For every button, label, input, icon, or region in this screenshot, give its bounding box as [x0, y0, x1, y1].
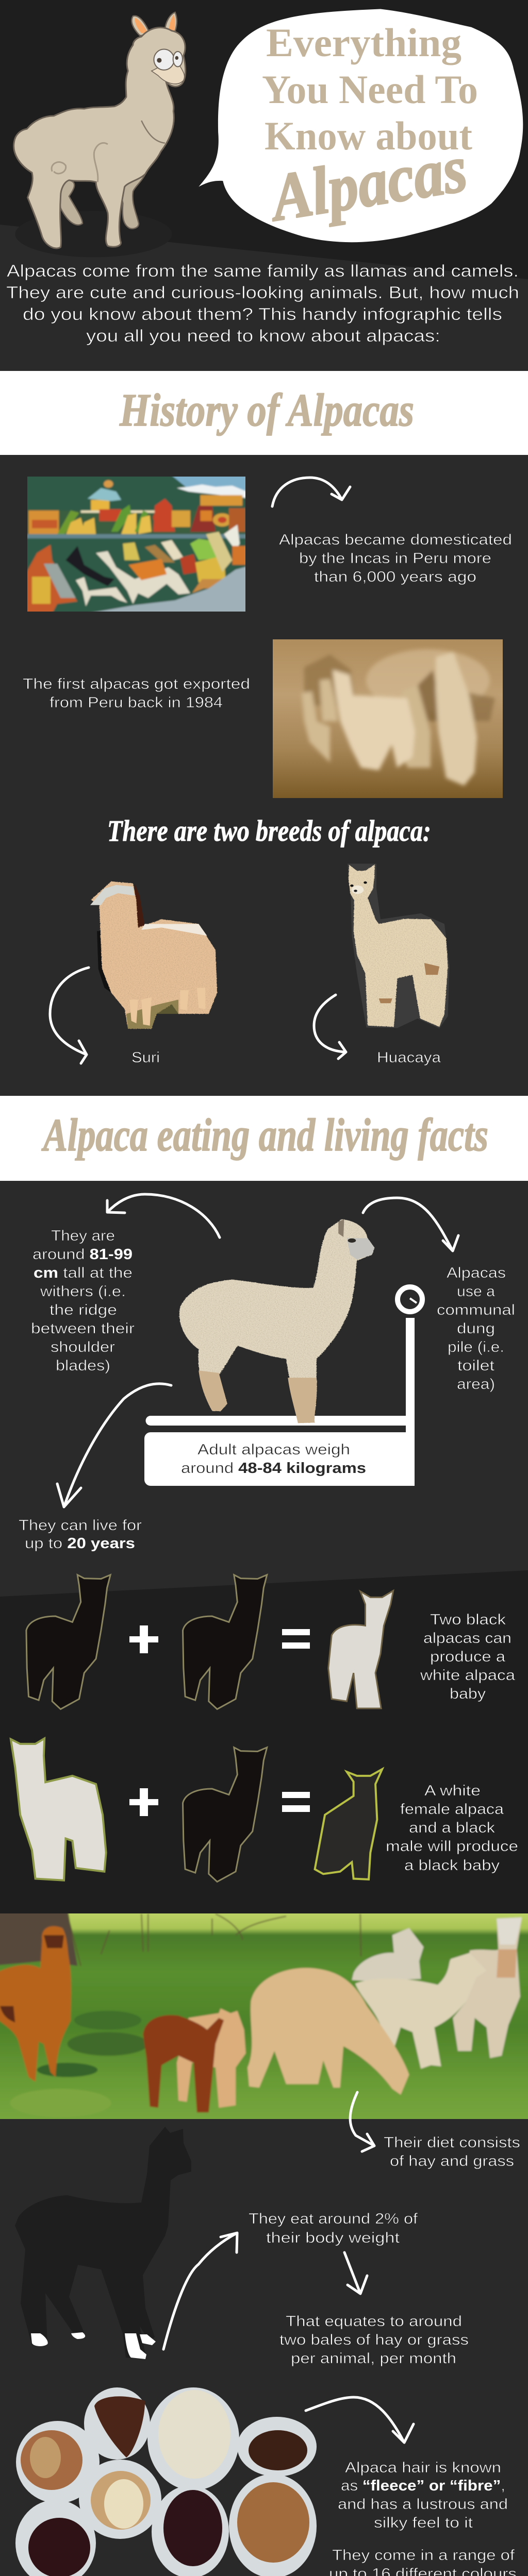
arrow: body weight — [163, 2233, 237, 2349]
speech bubble — [199, 9, 523, 242]
icon: equals — [282, 1629, 310, 1649]
arrow: lifespan — [57, 1384, 171, 1507]
heading: History of Alpacas: History of Alpacas — [119, 385, 414, 436]
title: You Need To — [262, 67, 478, 112]
text: dung pile: communal — [437, 1302, 515, 1318]
text: dung pile: area) — [457, 1376, 495, 1393]
equation: two black alpacas — [26, 1575, 516, 1709]
arrow — [272, 478, 350, 506]
text: height: They are — [51, 1228, 115, 1244]
intro text: Alpacas come from the same family as llamas and camels. — [7, 261, 519, 280]
text: domesticated — [279, 532, 512, 585]
title: Alpacas — [263, 131, 472, 236]
heading: two breeds: There are two breeds of alpaca: — [107, 814, 431, 848]
text: black baby: A white — [424, 1783, 481, 1799]
icon: white baby alpaca — [328, 1590, 393, 1708]
text: weight: around 48-84 kilograms — [181, 1460, 366, 1477]
image: Suri alpaca — [90, 882, 217, 1029]
text: bales: per animal, per month — [291, 2350, 456, 2367]
text: black baby: male will produce — [386, 1838, 518, 1855]
text: domesticated: by the Incas in Peru more — [299, 550, 491, 567]
intro text: you all you need to know about alpacas: — [86, 326, 440, 345]
title — [262, 20, 478, 236]
text: height: cm tall at the — [34, 1265, 133, 1281]
text: bales: two bales of hay or grass — [279, 2332, 469, 2348]
arrow: bales — [344, 2252, 367, 2294]
icon: black alpaca — [26, 1575, 110, 1709]
panel: facts — [0, 1181, 528, 1913]
text: fleece: as “fleece” or “fibre” , — [341, 2478, 505, 2494]
icon: alpaca silhouette — [15, 2127, 191, 2359]
text: lifespan: They can live for — [19, 1517, 142, 1534]
arrow: Huacaya — [314, 995, 346, 1059]
equation: white and black alpacas — [11, 1738, 518, 1882]
text: black baby — [386, 1783, 518, 1874]
panel: history — [0, 455, 528, 1096]
text: fleece: and has a lustrous and — [338, 2496, 508, 2513]
image: sepia alpacas — [273, 639, 503, 798]
text: height: around 81-99 — [32, 1246, 133, 1263]
text: white baby: produce a — [430, 1649, 506, 1665]
title: Know about — [265, 113, 472, 158]
text: weight: Adult alpacas weigh — [197, 1442, 350, 1458]
text: dung pile: pile (i.e. — [448, 1339, 504, 1355]
intro text: do you know about them? This handy infographic tells — [23, 304, 502, 324]
panel: hero — [0, 0, 528, 371]
text: height: blades) — [56, 1358, 110, 1374]
icon: cartoon alpaca — [14, 12, 186, 257]
text: diet: of hay and grass — [390, 2153, 514, 2170]
label: Huacaya: Huacaya — [377, 1049, 441, 1066]
text: body weight: their body weight — [266, 2230, 400, 2246]
text: bales: That equates to around — [286, 2313, 462, 2330]
text: black baby: and a black — [409, 1820, 496, 1836]
icon: plus — [129, 1788, 158, 1816]
text: height: shoulder — [51, 1339, 115, 1355]
text: black baby: female alpaca — [400, 1801, 504, 1818]
icon: plus — [129, 1625, 158, 1653]
text: diet: Their diet consists — [384, 2134, 520, 2151]
text: height: between their — [31, 1320, 135, 1337]
text: exported: The first alpacas got exported — [23, 676, 250, 692]
image: bags of coloured fleece — [15, 2387, 317, 2576]
icon: white alpaca — [11, 1738, 106, 1880]
text: fleece: They come in a range of — [332, 2547, 515, 2564]
arrow: Suri — [50, 968, 89, 1063]
text: height — [31, 1228, 135, 1374]
image: Huacaya alpaca — [348, 863, 450, 1028]
text: domesticated: than 6,000 years ago — [314, 569, 476, 585]
text: fleece: Alpaca hair is known — [345, 2460, 501, 2476]
text: weight — [181, 1442, 366, 1477]
intro text: They are cute and curious-looking animals. But, how much — [6, 283, 519, 302]
weighing scale — [144, 1287, 422, 1486]
text: body weight — [249, 2211, 418, 2246]
text: dung pile: dung — [457, 1320, 495, 1337]
text: height: the ridge — [50, 1302, 117, 1318]
icon: equals — [282, 1792, 310, 1812]
image: Inca painting — [27, 477, 245, 612]
arrow: fleece — [306, 2397, 414, 2443]
text: dung pile: toilet — [457, 1358, 494, 1374]
text: diet — [384, 2134, 520, 2170]
icon: black alpaca — [183, 1748, 267, 1882]
text: dung pile: use a — [457, 1283, 496, 1300]
text: lifespan — [19, 1517, 142, 1552]
text: white baby: white alpaca — [420, 1667, 516, 1684]
icon: black alpaca — [183, 1575, 267, 1709]
text: dung pile — [437, 1265, 515, 1393]
intro text — [6, 261, 519, 345]
text: white baby: Two black — [430, 1612, 506, 1628]
panel: feeding and fleece — [0, 2092, 528, 2576]
text: height: withers (i.e. — [40, 1283, 126, 1300]
text: domesticated: Alpacas became domesticated — [279, 532, 512, 548]
text: white baby: alpacas can — [423, 1630, 512, 1647]
text: bales — [279, 2313, 469, 2367]
text: exported — [23, 676, 250, 711]
arrow: diet — [350, 2092, 374, 2151]
text: black baby: a black baby — [404, 1857, 500, 1874]
text: exported: from Peru back in 1984 — [50, 694, 223, 711]
label: Suri: Suri — [131, 1049, 160, 1066]
title: Everything — [266, 20, 461, 65]
text: white baby: baby — [450, 1686, 486, 1702]
text: dung pile: Alpacas — [447, 1265, 506, 1281]
text: lifespan: up to 20 years — [25, 1535, 135, 1552]
arrow: dung pile — [363, 1198, 458, 1251]
text: fleece: silky feel to it — [374, 2515, 473, 2531]
icon: black baby alpaca — [315, 1769, 382, 1879]
image: adult alpaca — [179, 1219, 374, 1423]
text: fleece — [329, 2460, 517, 2576]
text: body weight: They eat around 2% of — [249, 2211, 418, 2227]
arrow: height — [107, 1194, 220, 1238]
image: alpacas grazing in a field — [0, 1907, 528, 2124]
text: white baby — [420, 1612, 516, 1702]
